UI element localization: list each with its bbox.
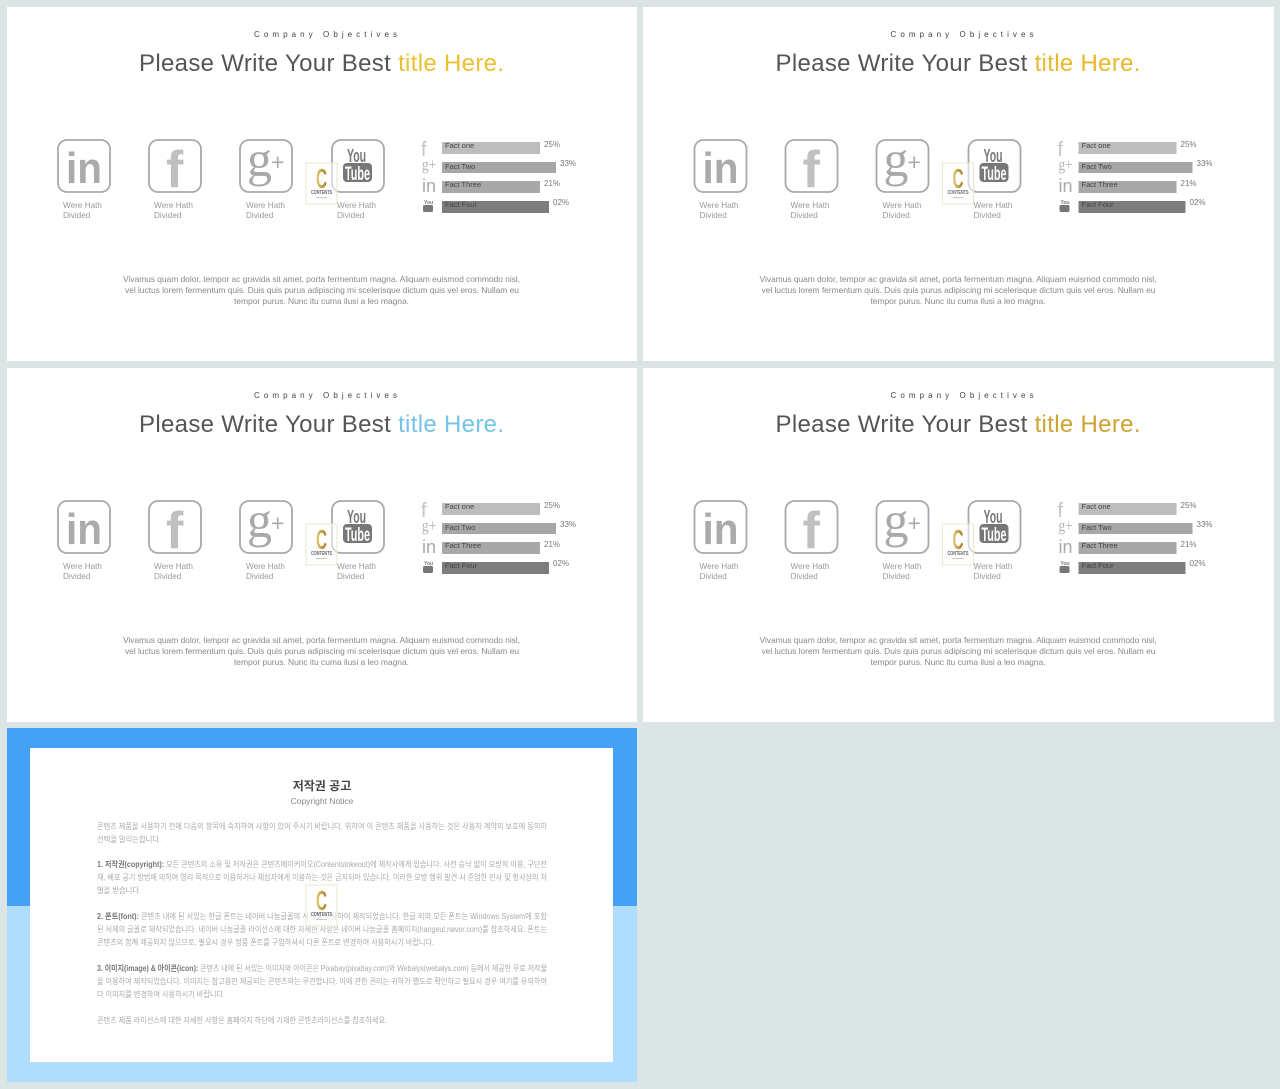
bar chart: facts: 33% <box>560 520 576 529</box>
bar chart: facts: You <box>424 200 433 206</box>
bar chart: facts: 02% <box>553 559 569 568</box>
icon labels: Were Hath <box>790 201 830 210</box>
icon labels: Were Hath <box>882 201 922 210</box>
icon: google plus: g <box>247 131 272 187</box>
bar chart: facts: f <box>1058 500 1064 522</box>
icon labels: Were Hath <box>974 201 1013 210</box>
bar chart: facts: 02% <box>1190 559 1206 568</box>
watermark logo: CONTENTS <box>311 190 333 196</box>
eyebrow: Company Objectives <box>890 30 1034 39</box>
bar chart: facts: 21% <box>544 179 560 188</box>
slide 1: social media objectives, yellow title <box>7 7 637 361</box>
panel: notice sheet <box>30 748 613 1062</box>
subheading: Copyright Notice <box>291 796 354 806</box>
icon labels: Were Hath <box>246 201 285 210</box>
icon labels: Were Hath <box>700 201 739 210</box>
slide 4: social media objectives, dark gold title <box>643 368 1274 722</box>
icon: google plus: + <box>271 149 284 175</box>
bar chart: facts: 21% <box>544 540 560 549</box>
bar chart: facts: Fact Four <box>445 200 478 209</box>
icon: youtube: You <box>347 507 366 527</box>
section: copyright <box>97 859 547 895</box>
bar chart: facts: You <box>1060 200 1070 206</box>
intro text: 선택을 알리는합니다. <box>97 834 161 844</box>
watermark logo: CONTENTS <box>311 551 333 557</box>
icon: google plus <box>240 492 292 553</box>
bar chart: facts: You <box>1060 561 1070 567</box>
icon labels: Divided <box>337 572 365 581</box>
icon labels: Divided <box>154 211 182 220</box>
icon labels: Divided <box>700 572 727 581</box>
watermark logo: C <box>316 885 327 916</box>
body paragraph: Vivamus quam dolor, tempor ac gravida sit amet, porta fermentum magna. Aliquam euismod commodo nisl, <box>123 635 520 645</box>
icon: youtube: Tube <box>345 525 370 546</box>
bar chart: facts: Fact Two <box>1082 162 1112 171</box>
icon: linkedin <box>694 140 746 193</box>
icon labels: Were Hath <box>790 562 830 571</box>
icon labels: Divided <box>974 572 1001 581</box>
bar chart: facts: f <box>1058 139 1064 161</box>
bar chart: facts: 25% <box>544 140 560 149</box>
body paragraph: vel luctus lorem fermentum quis. Duis quis purus adipiscing mi scelerisque dictum quis vel eros. Nullam eu <box>762 646 1156 656</box>
icon labels: Divided <box>246 572 274 581</box>
icon: facebook: f <box>166 141 184 199</box>
watermark logo: C <box>952 524 964 555</box>
icon labels: Divided <box>974 211 1001 220</box>
icon: facebook <box>149 140 201 199</box>
icon labels: Divided <box>882 572 910 581</box>
body paragraph: Vivamus quam dolor, tempor ac gravida sit amet, porta fermentum magna. Aliquam euismod commodo nisl, <box>123 274 520 284</box>
icon: facebook: f <box>802 141 820 199</box>
body paragraph: vel luctus lorem fermentum quis. Duis quis purus adipiscing mi scelerisque dictum quis vel eros. Nullam eu <box>762 285 1156 295</box>
slide 2: social media objectives, gold title <box>643 7 1274 361</box>
bar chart: facts <box>1058 139 1213 213</box>
bar chart: facts: 25% <box>1180 501 1197 510</box>
body paragraph: vel luctus lorem fermentum quis. Duis quis purus adipiscing mi scelerisque dictum quis vel eros. Nullam eu <box>125 646 519 656</box>
bar chart: facts: Fact Three <box>1082 180 1118 189</box>
bar chart: facts: 21% <box>1180 540 1197 549</box>
body paragraph: Vivamus quam dolor, tempor ac gravida sit amet, porta fermentum magna. Aliquam euismod commodo nisl, <box>760 274 1156 284</box>
icon: linkedin: in <box>702 144 738 193</box>
icon: facebook: f <box>802 502 820 560</box>
bar chart: facts: g+ <box>1058 155 1072 174</box>
icon labels: Were Hath <box>154 562 193 571</box>
icon labels: Were Hath <box>882 562 922 571</box>
heading: 저작권 공고 <box>293 778 351 793</box>
icon: youtube: You <box>984 146 1002 166</box>
slide 3: social media objectives, blue title <box>7 368 637 722</box>
icon: google plus <box>876 131 928 192</box>
icon: facebook <box>149 501 201 560</box>
section: copyright: 재, 배포 공기 방법에 의하여 영리 목적으로 이용하거나 제삼자에게 이용하는 것은 금지되어 있습니다. 이러한 모방 행위 발견 시 준엄한 민사 및 형사상의 처 <box>97 872 547 882</box>
icon: youtube <box>968 140 1020 192</box>
icon: youtube: Tube <box>345 164 370 185</box>
bar chart: facts: You <box>424 561 433 567</box>
section: image and icon: 을 이용하여 제작되었습니다. 이미지는 참고용만 제공되는 콘텐츠와는 무관합니다. 이에 관한 권리는 귀하가 별도로 확인하고 필요시 경우 여기를 유의하여 <box>97 976 547 986</box>
icon labels: Were Hath <box>700 562 739 571</box>
icon: youtube: You <box>347 146 366 166</box>
watermark logo <box>306 163 337 204</box>
bar chart: facts: Fact Two <box>445 523 475 532</box>
icon labels: Were Hath <box>337 562 376 571</box>
bar chart: facts: 25% <box>544 501 560 510</box>
body paragraph <box>760 635 1156 667</box>
icon: google plus: + <box>908 149 921 175</box>
icon: linkedin: in <box>702 505 738 554</box>
icon labels: Divided <box>337 211 365 220</box>
watermark logo <box>942 524 974 565</box>
bar chart: facts: f <box>421 139 427 161</box>
section: image and icon <box>97 963 547 999</box>
bar chart: facts: Fact Four <box>445 561 478 570</box>
bar chart: facts: 02% <box>1190 198 1206 207</box>
eyebrow: Company Objectives <box>254 391 397 400</box>
bar chart: facts: f <box>421 500 427 522</box>
icon labels: Divided <box>882 211 910 220</box>
body paragraph <box>123 274 520 306</box>
body paragraph: tempor purus. Nunc itu cuma ilusi a leo magna. <box>234 296 409 306</box>
bar chart: facts: g+ <box>422 155 436 174</box>
intro text <box>97 821 548 844</box>
icon: youtube: Tube <box>982 164 1006 185</box>
watermark logo <box>306 885 337 926</box>
bar chart: facts: 21% <box>1180 179 1197 188</box>
bar chart: facts: Fact Three <box>445 180 481 189</box>
icon: google plus <box>876 492 928 553</box>
body paragraph <box>760 274 1156 306</box>
bar chart: facts: Fact one <box>445 502 474 511</box>
icon labels: Divided <box>700 211 727 220</box>
bar chart: facts: 25% <box>1180 140 1197 149</box>
background: blue bands <box>7 728 637 1082</box>
bar chart: facts: Fact Three <box>1082 541 1118 550</box>
icon: linkedin <box>694 501 746 554</box>
icon: linkedin: in <box>66 505 102 554</box>
bar chart: facts: 33% <box>1196 159 1213 168</box>
icon: linkedin <box>58 501 110 554</box>
section: font <box>97 911 548 947</box>
bar chart: facts: g+ <box>422 516 436 535</box>
bar chart: facts <box>1058 500 1213 574</box>
bar chart: facts <box>421 139 576 213</box>
body paragraph: tempor purus. Nunc itu cuma ilusi a leo magna. <box>234 657 409 667</box>
bar chart: facts: Fact Four <box>1082 200 1114 209</box>
icon: youtube: You <box>984 507 1002 527</box>
icon: google plus <box>240 131 292 192</box>
icon: google plus: g <box>884 492 908 548</box>
title: Please Write Your Best title Here. <box>776 411 1140 438</box>
icon labels: Were Hath <box>246 562 285 571</box>
section: font: 된 서체의 글꼴로 제작되었습니다. 네이버 나눔글꼴 라이선스에 대한 자세한 사항은 네이버 나눔글꼴 홈페이지(hangeul.naver.com)를 참조하세요. 폰트는 <box>97 924 547 934</box>
icon labels: Were Hath <box>154 201 193 210</box>
slide 5: copyright notice <box>7 728 637 1082</box>
eyebrow: Company Objectives <box>890 391 1034 400</box>
icon labels: Divided <box>63 572 91 581</box>
section: copyright: 1. 저작권(copyright): 모든 콘텐츠의 소유 및 저작권은 콘텐츠메이커이오(Contentstokeout)에 제작사에게 있습니다. 사전 승낙 없이 모방적 이용, 구단전 <box>97 859 547 869</box>
watermark logo: C <box>316 163 327 194</box>
section: copyright: 벌을 받습니다. <box>97 885 141 895</box>
watermark logo <box>942 163 974 204</box>
section: font: 콘텐츠의 함께 제공되지 않으므로, 필요시 경우 정품 폰트를 구입하셔서 다른 폰트로 변경하여 사용하시기 바랍니다. <box>97 937 434 947</box>
icon labels: Were Hath <box>63 201 102 210</box>
title: Please Write Your Best title Here. <box>139 50 504 77</box>
bar chart: facts <box>421 500 576 574</box>
icon labels: Were Hath <box>63 562 102 571</box>
body paragraph: vel luctus lorem fermentum quis. Duis quis purus adipiscing mi scelerisque dictum quis vel eros. Nullam eu <box>125 285 519 295</box>
icon: youtube: Tube <box>982 525 1006 546</box>
icon labels: Divided <box>790 572 818 581</box>
icon labels: Were Hath <box>974 562 1013 571</box>
icon labels: Divided <box>154 572 182 581</box>
icon labels <box>700 201 1013 220</box>
closing line: 콘텐츠 제품 라이선스에 대한 자세한 사항은 홈페이지 하단에 기재한 콘텐츠라이선스를 참조하세요. <box>97 1015 387 1025</box>
icon: google plus: g <box>884 131 908 187</box>
icon labels <box>63 562 376 581</box>
bar chart: facts: Fact one <box>1082 502 1111 511</box>
icon: facebook <box>786 140 838 199</box>
bar chart: facts: 33% <box>560 159 576 168</box>
icon labels <box>63 201 376 220</box>
bar chart: facts: in <box>422 176 436 196</box>
icon labels: Were Hath <box>337 201 376 210</box>
watermark logo: C <box>316 524 327 555</box>
icon: facebook <box>786 501 838 560</box>
icon labels <box>700 562 1013 581</box>
section: image and icon: 3. 이미지(image) & 아이콘(icon): 콘텐츠 내에 된 서있는 이미지와 아이콘은 Pixabay(pixabay.com)와 Webalys(webalys.com) 등에서 제공한 무료 저작물 <box>97 963 547 973</box>
eyebrow: Company Objectives <box>254 30 397 39</box>
icon: linkedin <box>58 140 110 193</box>
section: image and icon: 다 이미지를 변경하여 사용하시기 바랍니다. <box>97 989 225 999</box>
icon labels: Divided <box>63 211 91 220</box>
bar chart: facts: 33% <box>1196 520 1213 529</box>
watermark logo: CONTENTS <box>948 190 969 196</box>
bar chart: facts: 02% <box>553 198 569 207</box>
icon: youtube <box>332 140 384 192</box>
bar chart: facts: g+ <box>1058 516 1072 535</box>
watermark logo: C <box>952 163 964 194</box>
bar chart: facts: in <box>1058 176 1073 196</box>
body paragraph: tempor purus. Nunc itu cuma ilusi a leo magna. <box>870 296 1046 306</box>
icon: google plus: + <box>271 510 284 536</box>
icon: facebook: f <box>166 502 184 560</box>
intro text: 콘텐츠 제품을 사용하기 전에 다음의 항목에 숙지하여 사항이 있어 주시기 바랍니다. 위하여 이 콘텐츠 제품을 사용하는 것은 사용자 계약의 보호에 동의하 <box>97 821 548 831</box>
bar chart: facts: Fact one <box>445 141 474 150</box>
body paragraph: Vivamus quam dolor, tempor ac gravida sit amet, porta fermentum magna. Aliquam euismod commodo nisl, <box>760 635 1156 645</box>
title: Please Write Your Best title Here. <box>139 411 504 438</box>
bar chart: facts: in <box>422 537 436 557</box>
bar chart: facts: Fact Three <box>445 541 481 550</box>
bar chart: facts: Fact one <box>1082 141 1111 150</box>
bar chart: facts: Fact Two <box>445 162 475 171</box>
body paragraph: tempor purus. Nunc itu cuma ilusi a leo magna. <box>870 657 1046 667</box>
icon: google plus: g <box>247 492 272 548</box>
bar chart: facts: Fact Four <box>1082 561 1114 570</box>
watermark logo: CONTENTS <box>311 912 333 918</box>
icon: google plus: + <box>908 510 921 536</box>
icon labels: Divided <box>246 211 274 220</box>
watermark logo <box>306 524 337 565</box>
icon: linkedin: in <box>66 144 102 193</box>
body paragraph <box>123 635 520 667</box>
bar chart: facts: Fact Two <box>1082 523 1112 532</box>
watermark logo: CONTENTS <box>948 551 969 557</box>
icon: youtube <box>332 501 384 553</box>
title: Please Write Your Best title Here. <box>776 50 1140 77</box>
bar chart: facts: in <box>1058 537 1073 557</box>
icon labels: Divided <box>790 211 818 220</box>
icon: youtube <box>968 501 1020 553</box>
section: font: 2. 폰트(font): 콘텐츠 내에 된 서있는 한글 폰트는 네이버 나눔글꼴의 서체를 사용하여 제작되었습니다. 한글 외의 모든 폰트는 Windows System에 포함 <box>97 911 548 921</box>
